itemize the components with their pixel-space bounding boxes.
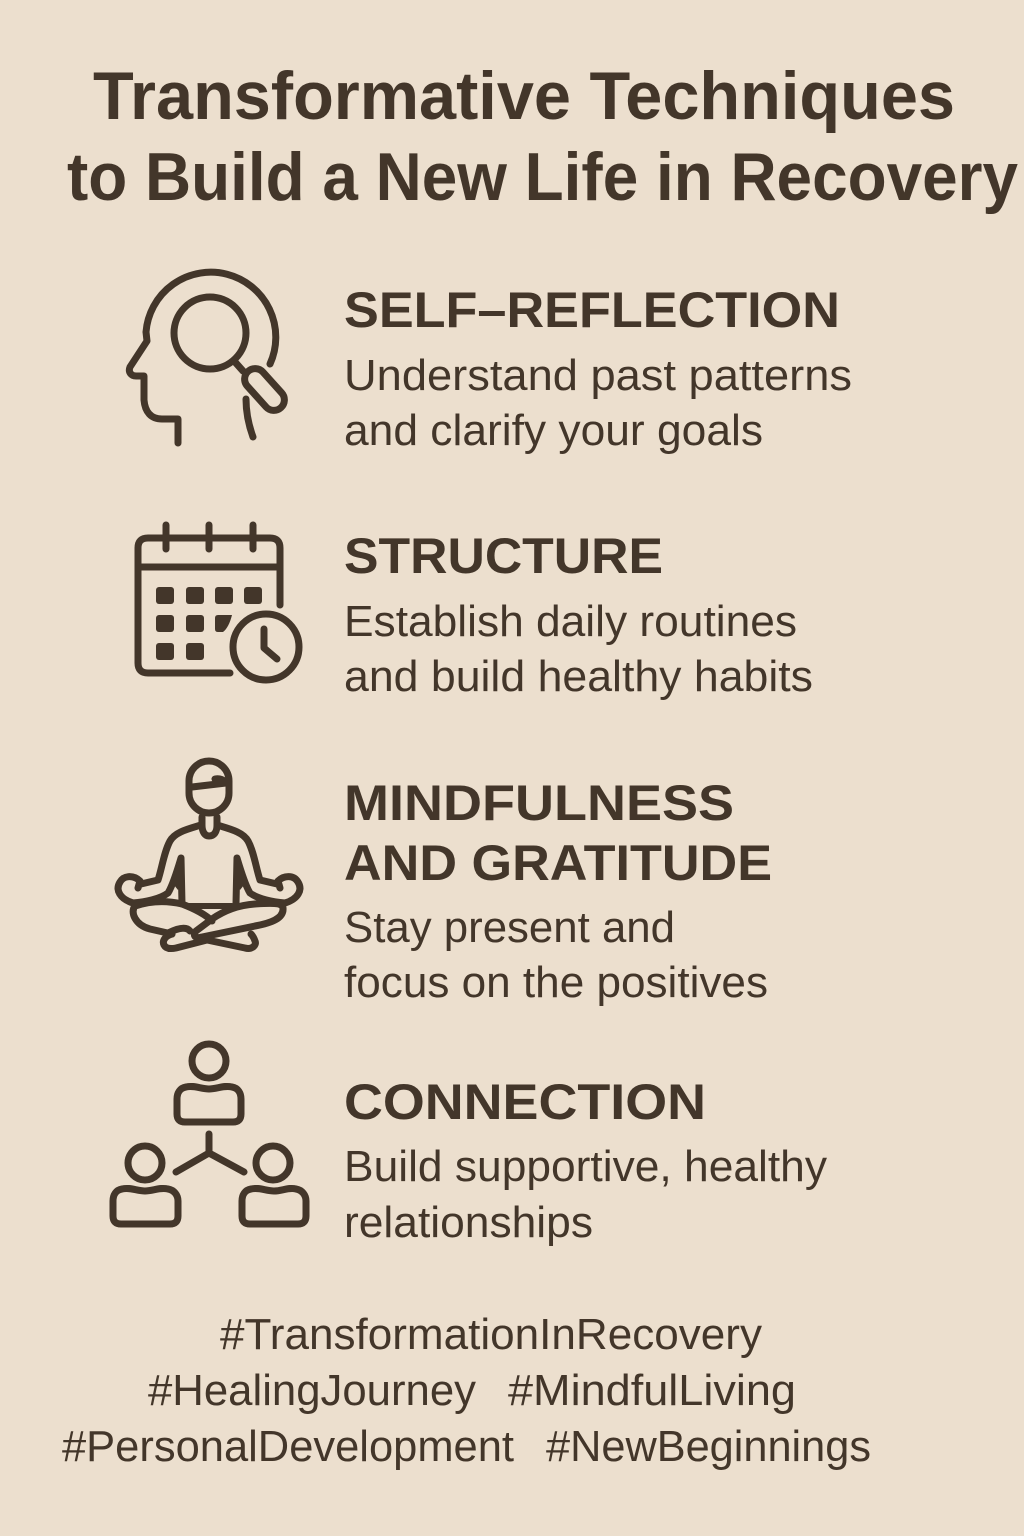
description: Establish daily routines (344, 597, 797, 646)
panel: mindfulness and gratitude (118, 761, 772, 1007)
heading: SELF–REFLECTION (344, 282, 840, 338)
description (344, 597, 813, 701)
heading: CONNECTION (344, 1074, 706, 1130)
hashtags: #TransformationInRecovery (220, 1310, 762, 1359)
icon: meditating person (118, 761, 300, 949)
heading: STRUCTURE (344, 528, 663, 584)
title: Transformative Techniques (93, 58, 955, 134)
description (344, 1142, 827, 1247)
description: Understand past patterns (344, 351, 852, 400)
description: Build supportive, healthy (344, 1142, 827, 1191)
description: and build healthy habits (344, 652, 813, 701)
description (344, 903, 768, 1007)
description: and clarify your goals (344, 406, 763, 455)
description (344, 351, 852, 455)
icon: three connected people (113, 1044, 306, 1224)
heading: AND GRATITUDE (344, 835, 772, 891)
hashtags: #MindfulLiving (508, 1366, 796, 1415)
description: relationships (344, 1198, 593, 1247)
hashtags: #NewBeginnings (546, 1422, 871, 1471)
title (67, 58, 1018, 215)
hashtags (62, 1310, 871, 1471)
heading (344, 775, 772, 891)
heading: MINDFULNESS (344, 775, 734, 831)
icon: calendar with clock (138, 525, 299, 680)
panel: self-reflection (129, 272, 852, 455)
hashtags: #HealingJourney (148, 1366, 476, 1415)
hashtags: #PersonalDevelopment (62, 1422, 514, 1471)
icon: head with magnifying glass (129, 272, 289, 443)
description: Stay present and (344, 903, 675, 952)
panel: structure (138, 525, 813, 701)
description: focus on the positives (344, 958, 768, 1007)
panel: connection (113, 1044, 827, 1247)
